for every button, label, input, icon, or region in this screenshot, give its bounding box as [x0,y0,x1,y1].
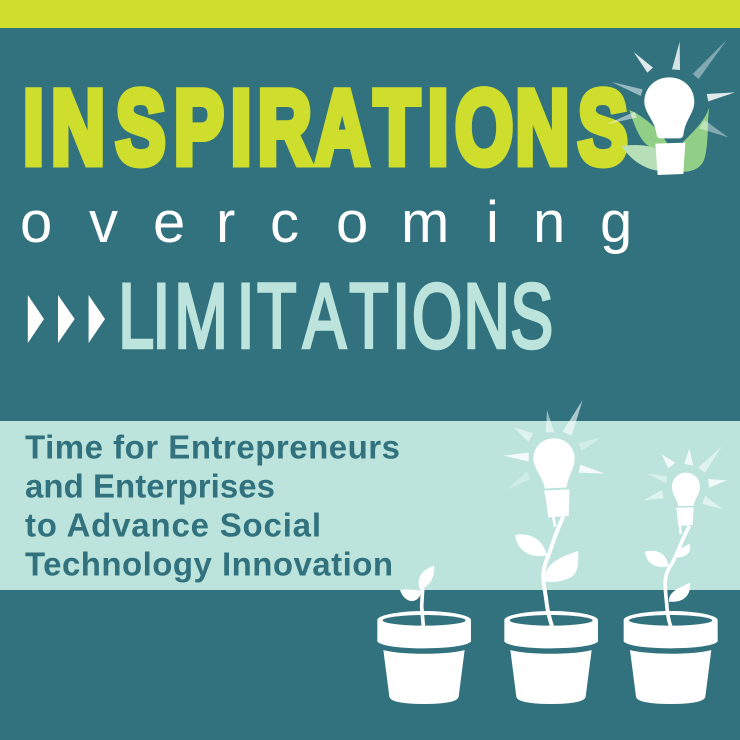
tall plant with bulb [503,400,605,704]
illustration: three potted plants [377,400,727,704]
word: LIMITATIONS: LIMITATIONS [118,264,553,367]
subtitle text: Time for Entrepreneurs [25,428,400,466]
word: overcoming: overcoming [20,190,632,255]
arrows: three chevrons [28,295,105,343]
bulb [644,77,694,138]
subtitle band [0,421,740,590]
title: INSPIRATIONS: INSPIRATIONS [23,70,628,187]
medium plant with bulb [624,447,727,704]
small sprout plant [377,566,471,704]
top accent band [0,0,740,28]
pot [655,143,685,175]
subtitle text [25,428,400,582]
subtitle text: and Enterprises [25,468,275,504]
rays [606,40,735,137]
icon: light bulb in pot [606,40,735,175]
green leaves [622,107,709,172]
subtitle text: to Advance Social [25,506,321,544]
subtitle text: Technology Innovation [25,546,393,582]
